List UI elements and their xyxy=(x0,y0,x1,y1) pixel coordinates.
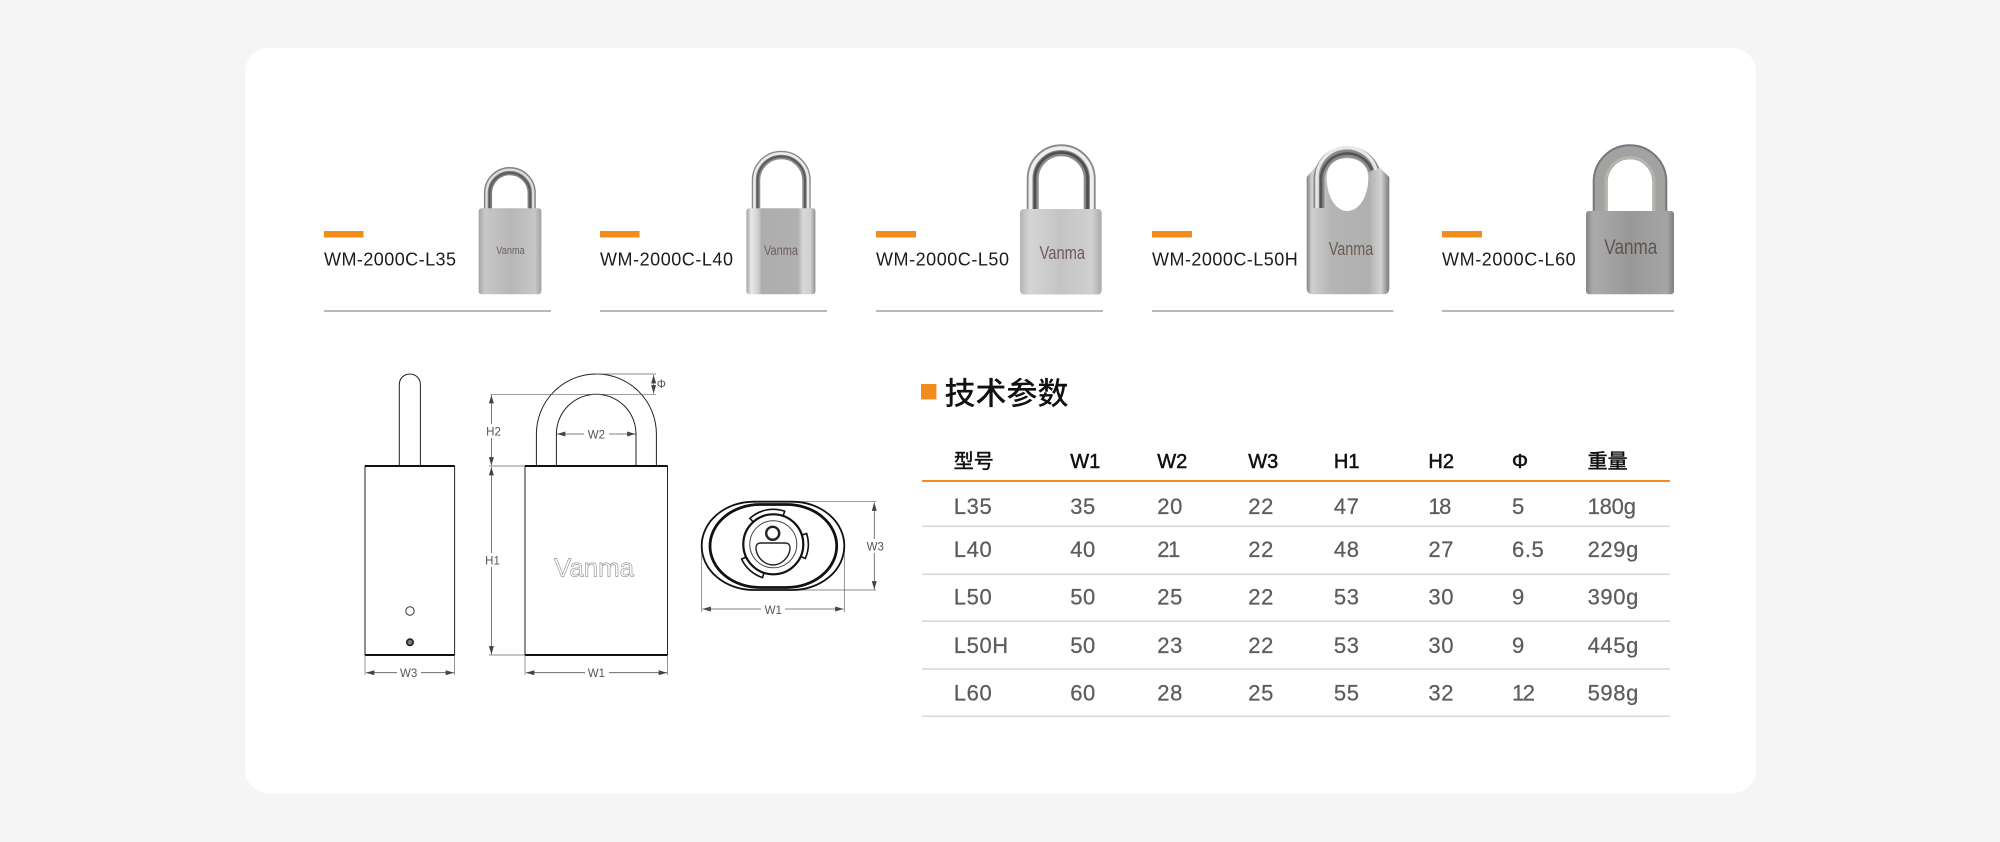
underline xyxy=(876,310,1103,312)
table row: L40: 27 xyxy=(1428,537,1454,562)
icon: padlock L40 xyxy=(746,153,815,294)
table row: L35: 47 xyxy=(1334,494,1360,519)
table row: L50: 50 xyxy=(1070,585,1096,610)
underline xyxy=(324,310,551,312)
table row: L40: 40 xyxy=(1070,537,1096,562)
table row: L35: 18 xyxy=(1428,494,1451,519)
product: WM-2000C-L50H xyxy=(1152,147,1394,312)
table row: L50H: 23 xyxy=(1157,633,1183,658)
table row: L50 xyxy=(954,585,1639,610)
underline xyxy=(600,310,827,312)
table row: L40: 48 xyxy=(1334,537,1360,562)
drawing: side view: W3 xyxy=(400,668,417,680)
icon: padlock L60: Vanma xyxy=(1604,236,1658,259)
table row: L40: L40 xyxy=(954,537,992,562)
icon: padlock L50: Vanma xyxy=(1040,243,1086,263)
drawing: bottom view xyxy=(702,502,887,617)
product: WM-2000C-L40 xyxy=(600,153,827,312)
table: specifications xyxy=(922,450,1670,717)
underline xyxy=(1442,310,1674,312)
table row: L50: 30 xyxy=(1428,585,1454,610)
section: technical parameters xyxy=(921,376,1670,717)
drawing: front view: Φ xyxy=(657,379,666,391)
drawing: front view: H1 xyxy=(485,556,500,568)
table row: L40: 21 xyxy=(1157,537,1180,562)
table row: L35: 22 xyxy=(1248,494,1274,519)
icon: padlock L35: Vanma xyxy=(496,245,525,257)
model label: WM-2000C-L50 xyxy=(876,250,1009,270)
model label: WM-2000C-L50H xyxy=(1152,250,1298,270)
drawing: bottom view: W3 xyxy=(867,542,884,554)
panel: white card xyxy=(245,48,1756,794)
accent bar xyxy=(324,231,364,238)
product: WM-2000C-L60 xyxy=(1442,152,1674,312)
heading: 技术参数 xyxy=(944,376,1068,412)
table row: L50H xyxy=(954,633,1639,658)
product: WM-2000C-L50 xyxy=(876,148,1103,312)
table row: L50H: 30 xyxy=(1428,633,1454,658)
table row: L60: 60 xyxy=(1070,680,1096,705)
table row: L50H: 22 xyxy=(1248,633,1274,658)
table row: L50H: 445g xyxy=(1588,633,1639,658)
product: WM-2000C-L35 xyxy=(324,170,551,312)
drawing: front view xyxy=(482,374,668,680)
table row: L50: L50 xyxy=(954,585,992,610)
table header row: Φ xyxy=(1512,451,1528,473)
drawing: front view: W1 xyxy=(588,668,605,680)
table row: L35: L35 xyxy=(954,494,992,519)
table row: L60: 25 xyxy=(1248,680,1274,705)
table header row: W2 xyxy=(1157,451,1187,473)
icon: padlock L50 xyxy=(1020,148,1102,294)
table header row: 型号 xyxy=(954,450,994,473)
icon: padlock L40: Vanma xyxy=(764,242,798,258)
table row: L50: 53 xyxy=(1334,585,1360,610)
table row: L50: 9 xyxy=(1512,585,1525,610)
table row: L50H: 50 xyxy=(1070,633,1096,658)
table header row: H1 xyxy=(1334,451,1359,473)
icon: padlock L50H xyxy=(1307,147,1389,294)
icon: padlock L35 xyxy=(479,170,541,294)
icon: padlock L50H: Vanma xyxy=(1329,239,1374,259)
table row: L35: 20 xyxy=(1157,494,1183,519)
accent bar xyxy=(600,231,640,238)
table row: L50: 25 xyxy=(1157,585,1183,610)
icon: padlock L60 xyxy=(1586,152,1674,294)
table header row: W3 xyxy=(1248,451,1278,473)
table row: L60: 12 xyxy=(1512,680,1535,705)
drawing: bottom view: W1 xyxy=(765,605,782,617)
model label: WM-2000C-L40 xyxy=(600,250,733,270)
panel: product lineup xyxy=(324,147,1674,312)
table row: L35: 180g xyxy=(1588,494,1636,519)
table row: L60 xyxy=(954,680,1639,705)
table row: L60: L60 xyxy=(954,680,992,705)
table header row: 重量 xyxy=(1588,450,1628,473)
table row: L35: 5 xyxy=(1512,494,1525,519)
accent bar xyxy=(1152,231,1192,238)
table row: L60: 32 xyxy=(1428,680,1454,705)
drawing: front view: H2 xyxy=(486,426,501,438)
table row: L40: 6.5 xyxy=(1512,537,1544,562)
table row: L60: 55 xyxy=(1334,680,1360,705)
table row: L50H: 53 xyxy=(1334,633,1360,658)
table row: L40: 229g xyxy=(1588,537,1639,562)
accent bar xyxy=(876,231,916,238)
table header row: W1 xyxy=(1070,451,1100,473)
table header row xyxy=(954,450,1628,473)
table row: L35: 35 xyxy=(1070,494,1096,519)
table row: L40 xyxy=(954,537,1639,562)
model label: WM-2000C-L35 xyxy=(324,250,456,270)
table row: L50H: 9 xyxy=(1512,633,1525,658)
table row: L50H: L50H xyxy=(954,633,1009,658)
table row: L50: 22 xyxy=(1248,585,1274,610)
table row: L40: 22 xyxy=(1248,537,1274,562)
model label: WM-2000C-L60 xyxy=(1442,250,1576,270)
technical drawings xyxy=(365,374,887,680)
drawing: front view: W2 xyxy=(588,430,605,442)
table header row: H2 xyxy=(1428,451,1454,473)
accent bar xyxy=(1442,231,1482,238)
table row: L50: 390g xyxy=(1588,585,1639,610)
drawing: side view xyxy=(365,374,455,680)
table row: L60: 28 xyxy=(1157,680,1183,705)
table row: L60: 598g xyxy=(1588,680,1639,705)
table row: L35 xyxy=(954,494,1636,519)
drawing: front view: Vanma xyxy=(554,553,635,583)
heading bullet xyxy=(921,384,936,399)
underline xyxy=(1152,310,1394,312)
